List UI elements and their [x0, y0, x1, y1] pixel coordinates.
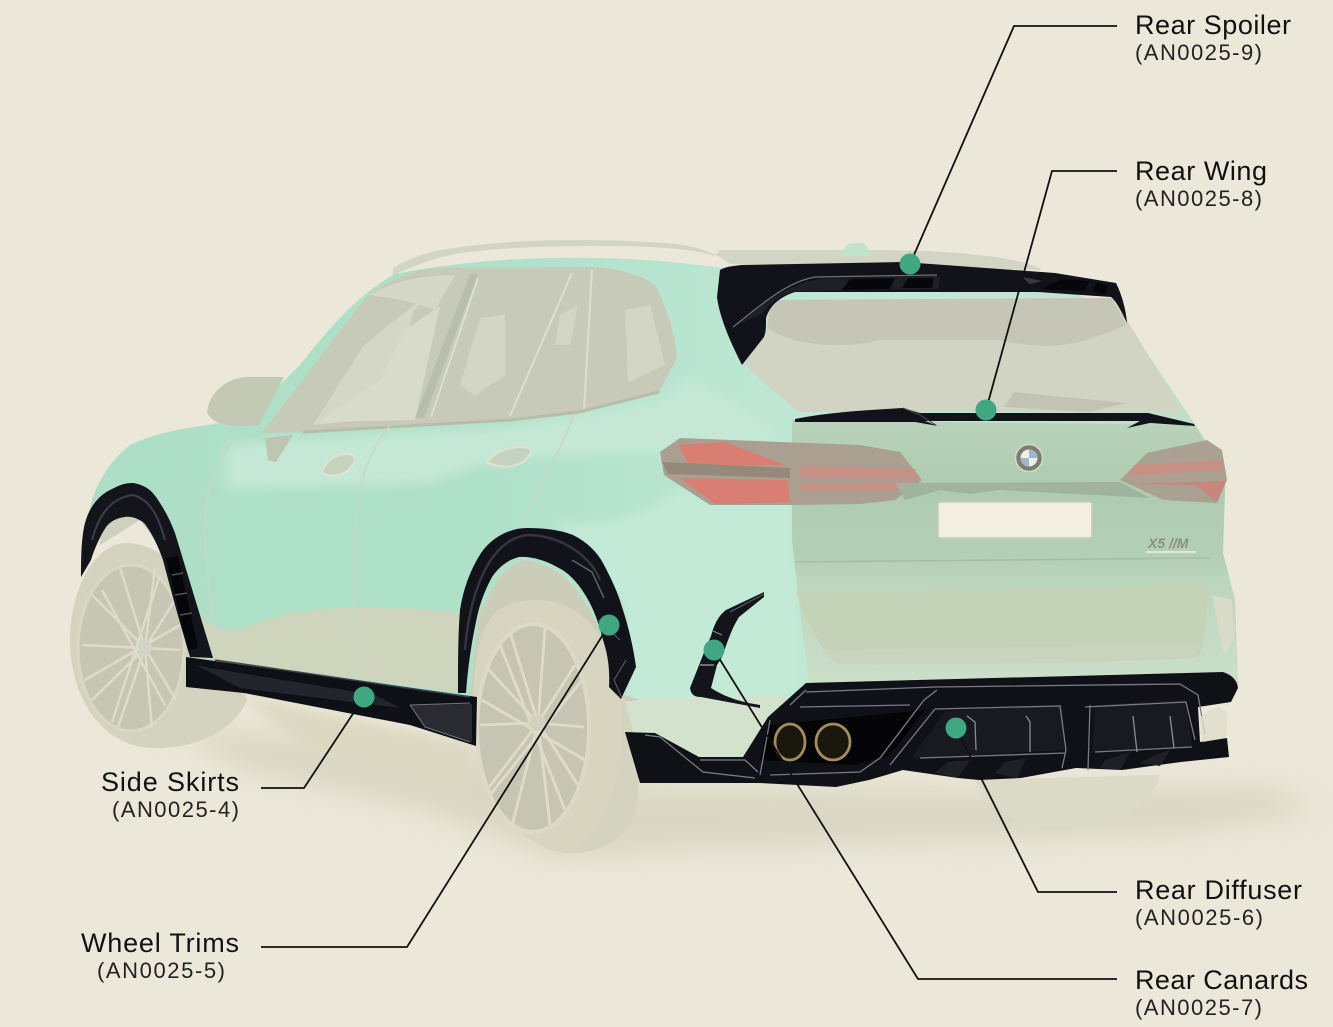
part: rear diffuser	[625, 672, 1238, 787]
body side	[86, 258, 1238, 770]
part: rear wheel trim	[458, 528, 636, 699]
rear corner reflector	[1212, 595, 1234, 655]
exhaust bay	[760, 710, 925, 765]
front wheel well	[100, 510, 235, 650]
label: rear spoiler	[1135, 10, 1291, 65]
label: rear canards: Rear Canards	[1135, 965, 1308, 995]
licence plate	[938, 502, 1092, 538]
part: rear canards	[690, 592, 764, 708]
diffuser highlights	[760, 684, 1205, 775]
lower door grey zone	[190, 600, 462, 692]
model badge: X5 //M	[1147, 535, 1189, 551]
label: rear spoiler: Rear Spoiler	[1135, 10, 1291, 40]
label: rear wing: Rear Wing	[1135, 156, 1267, 186]
label: wheel trims: (AN0025-5)	[97, 958, 225, 983]
far rear tyre	[975, 775, 1160, 830]
label: rear wing	[1135, 156, 1267, 211]
label: rear diffuser: Rear Diffuser	[1135, 875, 1302, 905]
tail light right	[1120, 440, 1227, 503]
diffuser panels	[912, 705, 1066, 758]
side mirror	[207, 377, 293, 462]
label: rear diffuser: (AN0025-6)	[1135, 905, 1263, 930]
shark fin	[838, 243, 872, 256]
rear wheel well	[470, 560, 640, 720]
label: side skirts: Side Skirts	[101, 767, 239, 797]
roof rail and upper roof	[393, 240, 1042, 275]
front tyre and wheel	[70, 543, 247, 748]
near tyre and wheel	[473, 600, 639, 853]
car illustration	[70, 240, 1238, 853]
BMW badge	[1016, 444, 1042, 472]
door shut lines	[205, 415, 574, 667]
callout dots	[354, 254, 996, 738]
trim bar under lights	[895, 482, 1150, 500]
ground shadow	[170, 695, 1325, 860]
door handles	[322, 447, 531, 476]
label: side skirts	[101, 767, 239, 822]
part: front wheel trim	[81, 483, 213, 658]
label: rear spoiler: (AN0025-9)	[1135, 40, 1262, 65]
tail light left	[660, 438, 922, 505]
side windows	[262, 267, 677, 433]
label: side skirts: (AN0025-4)	[112, 797, 239, 822]
label: rear canards: (AN0025-7)	[1135, 995, 1262, 1020]
part: side skirts	[186, 657, 477, 746]
label: rear canards	[1135, 965, 1308, 1020]
lower tailgate recess	[795, 558, 1210, 664]
rear window	[744, 298, 1182, 412]
far reflector	[1200, 708, 1228, 742]
rear quarter panel	[550, 490, 800, 760]
part: rear wing	[795, 408, 1195, 428]
rear panel	[792, 420, 1238, 695]
label: wheel trims	[81, 928, 239, 983]
leader lines	[261, 26, 1117, 979]
light band above door crease	[225, 378, 785, 490]
label: wheel trims: Wheel Trims	[81, 928, 239, 958]
label: rear wing: (AN0025-8)	[1135, 186, 1262, 211]
label: rear diffuser	[1135, 875, 1302, 930]
part: rear spoiler	[717, 262, 1127, 365]
exhaust tips	[775, 724, 850, 760]
